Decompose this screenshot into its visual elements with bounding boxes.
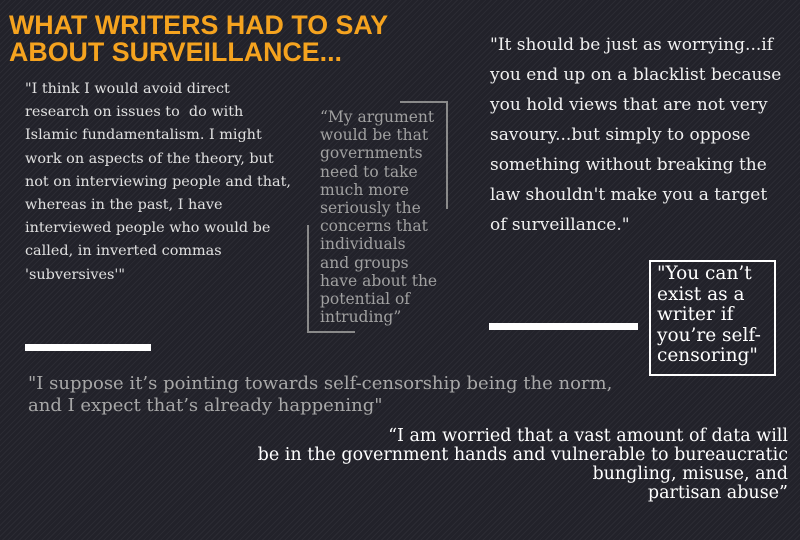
quote: blacklist [490, 35, 781, 235]
quote: vast amount of data [258, 426, 788, 503]
quote: avoid direct research: Islamic fundamentalism. I might [25, 127, 262, 143]
quote: my argument: individuals [320, 235, 406, 253]
quote: vast amount of data: be in the government hands and vulnerable to bureaucratic [258, 445, 788, 465]
title: WHAT WRITERS HAD TO SAY [9, 10, 388, 40]
box quote: self-censoring: you’re self- [657, 324, 761, 346]
quote: blacklist: savoury...but simply to oppose [490, 125, 750, 145]
box quote: self-censoring: "You can’t [657, 263, 752, 284]
box quote: self-censoring: exist as a [657, 284, 745, 304]
bracket: bottom left [307, 225, 355, 333]
box quote: self-censoring: writer if [657, 304, 733, 325]
quote: self-censorship norm [28, 373, 612, 416]
quote: my argument: concerns that [320, 217, 428, 235]
quote: avoid direct research: "I think I would avoid direct [25, 81, 230, 97]
quote: blacklist: you end up on a blacklist because [490, 65, 781, 85]
quote: avoid direct research: research on issues to do with [25, 104, 243, 120]
quote: vast amount of data: partisan abuse” [648, 483, 788, 503]
bracket: top right [400, 101, 448, 209]
quote: avoid direct research: called, in inverted commas [25, 243, 222, 259]
quote: avoid direct research: 'subversives'" [25, 267, 125, 283]
quote: my argument: much more [320, 181, 409, 199]
quote: my argument: need to take [320, 163, 418, 181]
quote: avoid direct research: work on aspects of the theory, but [25, 151, 274, 167]
quote: my argument [320, 108, 437, 326]
bar: left [25, 344, 151, 351]
title: ABOUT SURVEILLANCE... [9, 37, 342, 67]
quote: avoid direct research: whereas in the past, I have [25, 197, 222, 213]
quote: blacklist: something without breaking the [490, 155, 767, 175]
quote: my argument: and groups [320, 254, 409, 272]
quote: self-censorship norm: "I suppose it’s pointing towards self-censorship being the norm, [28, 373, 612, 394]
quote: my argument: would be that [320, 126, 428, 144]
bar: right [489, 323, 638, 330]
quote: my argument: potential of [320, 290, 410, 308]
quote: my argument: governments [320, 144, 423, 162]
quote: avoid direct research: interviewed people who would be [25, 220, 270, 236]
quote: blacklist: you hold views that are not very [490, 95, 768, 115]
quote: vast amount of data: bungling, misuse, and [592, 464, 788, 484]
box quote: self-censoring: censoring" [657, 345, 758, 366]
quote: avoid direct research [25, 81, 291, 283]
quote: my argument: have about the [320, 272, 437, 290]
quote: avoid direct research: not on interviewing people and that, [25, 174, 291, 190]
quote: blacklist: "It should be just as worrying...if [490, 35, 773, 55]
quote: self-censorship norm: and I expect that’s already happening" [28, 395, 383, 416]
title [9, 10, 388, 67]
quote: my argument: intruding” [320, 308, 401, 326]
quote: my argument: “My argument [320, 108, 434, 126]
quote: blacklist: of surveillance." [490, 215, 630, 235]
quote: blacklist: law shouldn't make you a target [490, 185, 767, 205]
quote: vast amount of data: “I am worried that a vast amount of data will [388, 426, 788, 446]
box quote: self-censoring [649, 260, 776, 376]
quote: my argument: seriously the [320, 199, 421, 217]
